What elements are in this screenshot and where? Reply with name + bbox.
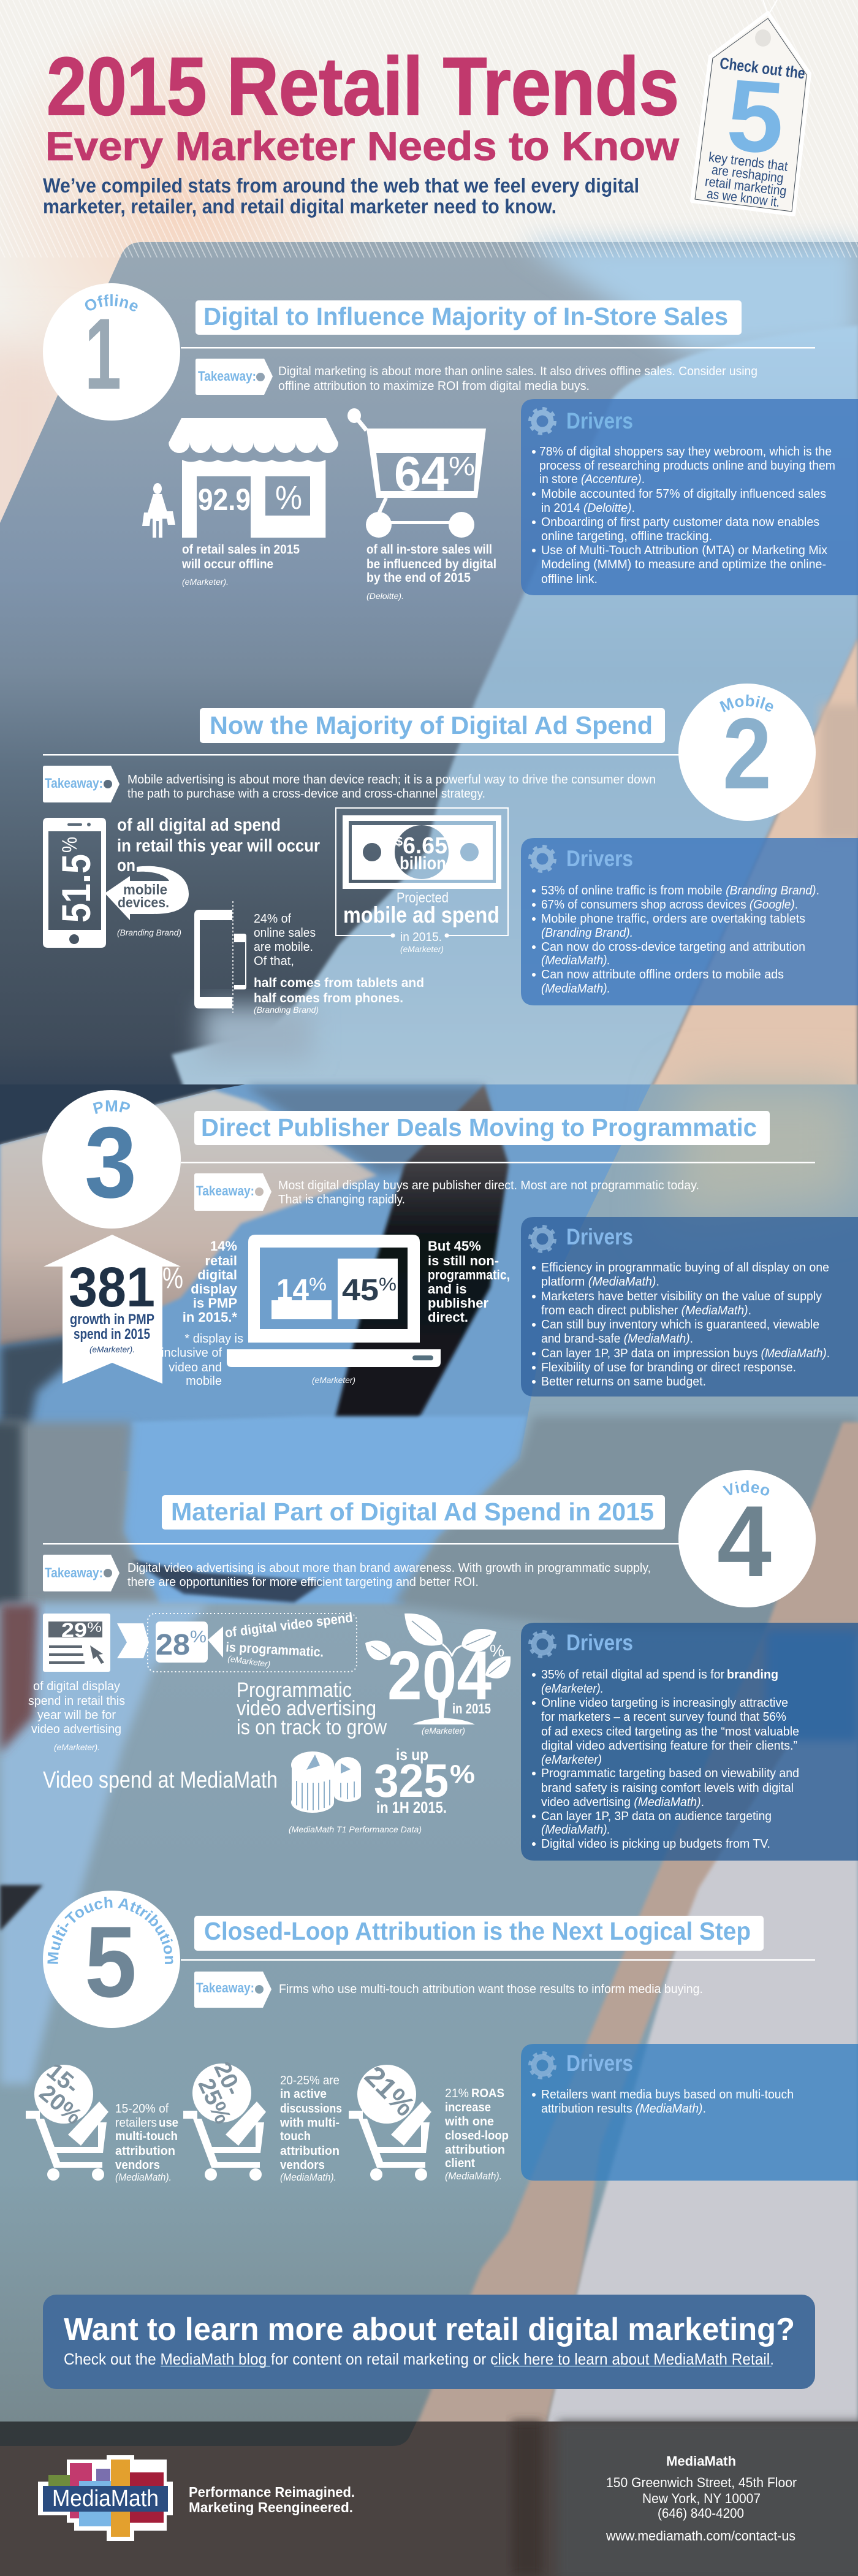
money box: $6.65 billion: billion xyxy=(400,853,446,874)
stat text: 20-25%: attribution xyxy=(280,2144,340,2158)
takeaway text: Digital marketing is about more than online sales. It also drives offline sales. Consider using xyxy=(278,365,757,378)
source: (Branding Brand) xyxy=(117,928,181,937)
stat text: 21%: with one xyxy=(444,2115,494,2128)
number badge 3: 3 xyxy=(85,1106,137,1219)
takeaway text: That is changing rapidly. xyxy=(278,1193,405,1206)
callout: 28% of digital video spend: 28 xyxy=(156,1629,190,1661)
callout: 28% of digital video spend: (eMarketer) xyxy=(227,1653,271,1669)
arrow: 381% growth: spend in 2015 xyxy=(74,1326,150,1343)
heading bar: Digital to Influence Majority of In-Store Sales xyxy=(203,302,728,330)
text: video spend: Video spend at MediaMath xyxy=(43,1767,278,1793)
stat text: 24%: (Branding Brand) xyxy=(254,1005,319,1015)
stat text: 20-25%: (MediaMath). xyxy=(280,2171,336,2183)
heading bar: Now the Majority of Digital Ad Spend xyxy=(210,711,653,739)
icon: laptop with bar chart: % xyxy=(309,1275,327,1295)
contact xyxy=(606,2453,797,2544)
panel: drivers 3 xyxy=(521,1217,858,1397)
panel: drivers 3: Better returns on same budget. xyxy=(541,1375,706,1389)
panel: drivers 5: Drivers xyxy=(566,2051,633,2076)
panel: drivers 4: Online video targeting is increasingly attractive xyxy=(541,1696,788,1710)
stat text: 15-20%: multi-touch xyxy=(115,2130,178,2143)
number badge 1: Offline xyxy=(85,294,138,311)
icon: cart with 64% xyxy=(347,408,486,538)
icon: phone with 51.5% xyxy=(43,818,106,948)
stat: 325%: % xyxy=(450,1759,475,1788)
takeaway text xyxy=(127,1561,651,1589)
stat text: 21%: increase xyxy=(445,2101,491,2114)
number badge 5: Multi-Touch Attribution xyxy=(47,1897,173,1964)
panel: drivers 3: platform (MediaMath). xyxy=(541,1275,659,1289)
icon: cart 20-25% xyxy=(183,2058,266,2181)
panel: drivers 3: Marketers have better visibility on the value of supply xyxy=(541,1290,822,1303)
panel: drivers 4: brand safety is raising comfort levels with digital xyxy=(541,1781,794,1795)
stat text: 24%: are mobile. xyxy=(254,940,313,954)
panel: drivers 2: 53% of online traffic is from mobile (Branding Brand). xyxy=(541,884,819,897)
panel: drivers 2 xyxy=(521,838,858,1005)
stat text: 51.5%: of all digital ad spend xyxy=(117,815,281,835)
intro text: We’ve compiled stats from around the web that we feel every digital xyxy=(43,174,639,197)
stat text: 45%: But 45% xyxy=(428,1238,481,1254)
section 2: mobile xyxy=(43,684,858,1015)
text: programmatic video xyxy=(237,1679,387,1739)
price tag: check out the 5 key trends: retail marketing xyxy=(704,173,788,199)
stat text: 24%: online sales xyxy=(254,926,316,940)
stat text: 21%: attribution xyxy=(445,2143,505,2157)
panel: drivers 5 xyxy=(521,2044,858,2181)
takeaway text: Digital video advertising is about more than brand awareness. With growth in programmatic supply, xyxy=(127,1561,651,1575)
stat: 325%: in 1H 2015. xyxy=(376,1798,447,1816)
intro text: marketer, retailer, and retail digital marketer need to know. xyxy=(43,195,556,218)
panel: drivers 4: Can layer 1P, 3P data on audience targeting xyxy=(541,1810,772,1823)
contact: MediaMath xyxy=(666,2453,736,2469)
price tag: check out the 5 key trends: Check out the xyxy=(719,54,806,82)
stat text: 14%: mobile xyxy=(186,1374,222,1388)
money box: $6.65 billion: in 2015. xyxy=(400,931,442,944)
panel: drivers 4: (eMarketer) xyxy=(541,1753,602,1767)
takeaway text: Firms who use multi-touch attribution want those results to inform media buying. xyxy=(279,1983,703,1996)
stat text: 64%: of all in-store sales will xyxy=(366,543,492,557)
panel: drivers 4: Digital video is picking up budgets from TV. xyxy=(541,1837,770,1851)
number badge 4 xyxy=(678,1470,816,1607)
stat text: 20-25%: vendors xyxy=(280,2159,325,2172)
money box: $6.65 billion xyxy=(336,808,508,954)
stat text: 14%: is PMP xyxy=(193,1295,237,1311)
panel: drivers 3: Efficiency in programmatic buying of all display on one xyxy=(541,1261,829,1275)
icon: film reels / coins xyxy=(291,1751,361,1813)
price tag: check out the 5 key trends: are reshaping xyxy=(711,162,784,186)
stat text: 45%: direct. xyxy=(428,1309,468,1325)
panel: drivers 3: and brand-safe (MediaMath). xyxy=(541,1332,693,1346)
number badge 5: 5 xyxy=(85,1905,137,2018)
panel: drivers 1: Mobile accounted for 57% of digitally influenced sales xyxy=(541,487,826,501)
store icon with 92.9%: % xyxy=(275,479,302,516)
icon: laptop with bar chart: 14 xyxy=(276,1273,309,1307)
section 1: offline xyxy=(43,283,858,601)
stat text: 29%: (eMarketer). xyxy=(54,1742,100,1752)
stat text: 29%: of digital display xyxy=(33,1680,120,1693)
money box: $6.65 billion: 6.65 xyxy=(403,833,447,859)
takeaway tag xyxy=(194,1173,271,1211)
icon: plant with 204%: in 2015 xyxy=(452,1701,491,1717)
stat text: 24% xyxy=(254,912,424,1015)
stat text: 20-25%: with multi- xyxy=(279,2116,340,2130)
stat text: 15-20% xyxy=(115,2102,178,2183)
stat text: 29%: year will be for xyxy=(37,1709,116,1722)
number badge 1: 1 xyxy=(85,297,121,410)
stat text: 45%: and is xyxy=(428,1281,467,1297)
icon: cart 15-20%: 15- xyxy=(42,2059,84,2100)
money box: $6.65 billion: $ xyxy=(395,834,403,849)
money box: $6.65 billion: mobile ad spend xyxy=(343,902,499,928)
panel: drivers 1: in store (Accenture). xyxy=(539,473,645,486)
icon: plant with 204%: (eMarketer) xyxy=(422,1726,465,1736)
heading bar: Material Part of Digital Ad Spend in 2015 xyxy=(171,1498,654,1526)
panel: drivers 4: (eMarketer). xyxy=(541,1682,604,1696)
arrow: 381% growth xyxy=(44,1235,183,1384)
icon: browser with 29%: 29 xyxy=(61,1619,87,1641)
icon: cart 21%: 21% xyxy=(359,2060,421,2122)
panel: drivers 4: (MediaMath). xyxy=(541,1823,610,1837)
callout: 28% of digital video spend: % xyxy=(190,1627,207,1646)
icon: laptop with bar chart: (eMarketer) xyxy=(312,1375,355,1385)
arrow: 381% growth: growth in PMP xyxy=(70,1311,154,1328)
number badge 4: 4 xyxy=(717,1485,772,1598)
stat text: 92.9% offline: will occur offline xyxy=(181,557,273,571)
panel: drivers 2: Mobile phone traffic, orders are overtaking tablets xyxy=(541,912,805,926)
panel: drivers 5: attribution results (MediaMath). xyxy=(541,2102,706,2116)
section 4: video xyxy=(28,1470,858,1861)
stat text: 24%: half comes from phones. xyxy=(254,991,403,1005)
call to action: Want to learn more about retail digital marketing? xyxy=(64,2312,795,2347)
callout: 28% of digital video spend xyxy=(148,1610,357,1672)
title: 2015 Retail Trends xyxy=(47,41,679,132)
arrow: 381% growth: 381 xyxy=(69,1256,155,1319)
call to action xyxy=(43,2295,815,2389)
text: programmatic video: Programmatic xyxy=(237,1679,352,1702)
takeaway tag xyxy=(43,1555,120,1591)
stat text: 21%: (MediaMath). xyxy=(445,2170,502,2182)
stat text: 14%: digital xyxy=(197,1267,237,1282)
contact: (646) 840-4200 xyxy=(658,2506,744,2521)
panel: drivers 2: (Branding Brand). xyxy=(541,926,633,940)
takeaway tag: Takeaway: xyxy=(196,1183,254,1198)
takeaway text: Mobile advertising is about more than device reach; it is a powerful way to drive the consumer down xyxy=(127,773,656,787)
number badge 2: Mobile xyxy=(719,694,773,712)
icon: phone with 51.5%: 51.5 xyxy=(53,854,99,923)
stat text: 21% xyxy=(444,2087,509,2182)
panel: drivers 2: (MediaMath). xyxy=(541,982,610,996)
price tag: check out the 5 key trends: key trends that xyxy=(708,149,789,174)
number badge 3: PMP xyxy=(93,1100,130,1115)
panel: drivers 2: Can now attribute offline orders to mobile ads xyxy=(541,968,784,981)
stat text: 15-20%: use xyxy=(159,2116,178,2130)
icon: laptop with bar chart: 45 xyxy=(342,1273,379,1307)
intro text xyxy=(43,174,639,218)
store icon with 92.9% xyxy=(169,418,338,538)
panel: drivers 1: process of researching products online and buying them xyxy=(539,459,835,473)
icon: plant with 204%: 204 xyxy=(387,1637,492,1714)
stat text: 20-25%: touch xyxy=(280,2130,311,2143)
panel: drivers 1: Onboarding of first party customer data now enables xyxy=(541,516,819,529)
tagline: Performance Reimagined. xyxy=(189,2484,355,2500)
stat text: 45% xyxy=(428,1238,510,1325)
price tag: check out the 5 key trends xyxy=(692,0,810,215)
subtitle: Every Marketer Needs to Know xyxy=(45,123,680,169)
panel: drivers 3: Can still buy inventory which is guaranteed, viewable xyxy=(541,1318,819,1332)
heading bar: Direct Publisher Deals Moving to Programmatic xyxy=(201,1113,757,1141)
stat text: 51.5% xyxy=(117,815,320,875)
stat text: 45%: is still non- xyxy=(428,1253,499,1268)
stat text: 15-20%: 15-20% of xyxy=(115,2102,169,2116)
text: programmatic video: is on track to grow xyxy=(237,1716,387,1739)
call to action: Check out the MediaMath blog for content on retail marketing or click here to learn about MediaMath Retail. xyxy=(64,2350,774,2368)
icon: cart 21% xyxy=(349,2060,431,2181)
arrow: 381% growth: (eMarketer). xyxy=(89,1344,135,1354)
money box: $6.65 billion: (eMarketer) xyxy=(400,944,444,954)
takeaway text: Most digital display buys are publisher direct. Most are not programmatic today. xyxy=(278,1179,699,1192)
stat text: 24%: Of that, xyxy=(254,955,294,968)
stat text: 51.5%: in retail this year will occur xyxy=(117,836,320,856)
panel: drivers 2: 67% of consumers shop across devices (Google). xyxy=(541,898,798,912)
heading bar: Closed-Loop Attribution is the Next Logical Step xyxy=(204,1917,751,1945)
stat text: 14% xyxy=(161,1238,243,1388)
icon: browser with 29%: % xyxy=(87,1620,102,1635)
takeaway tag: Takeaway: xyxy=(45,1565,103,1580)
stat text: 29%: video advertising xyxy=(31,1723,121,1736)
stat text: 20-25%: in active xyxy=(280,2087,327,2101)
stat text: 15-20%: (MediaMath). xyxy=(115,2171,172,2183)
stat: 325%: 325 xyxy=(374,1755,449,1807)
takeaway tag: Takeaway: xyxy=(198,368,256,384)
stat text: 15-20%: vendors xyxy=(115,2159,160,2172)
stat text: 21%: ROAS xyxy=(471,2087,504,2100)
stat text: 14%: inclusive of xyxy=(161,1346,222,1360)
callout: 28% of digital video spend: of digital video spend xyxy=(224,1610,354,1640)
takeaway text xyxy=(278,1179,699,1206)
arrow: mobile devices xyxy=(105,866,189,920)
number badge 1 xyxy=(43,283,180,421)
takeaway tag xyxy=(194,1972,271,2008)
takeaway tag xyxy=(43,766,120,802)
stat text: 14%: * display is xyxy=(184,1332,243,1346)
icon: split phone and tablet xyxy=(194,901,246,1013)
stat text: 15-20%: retailers xyxy=(115,2116,157,2130)
icon: shopper xyxy=(142,483,175,538)
stat text: 64%: be influenced by digital xyxy=(366,557,496,571)
stat: 325% xyxy=(289,1745,475,1834)
icon: cart 15-20% xyxy=(26,2059,108,2181)
panel: drivers 4: of ad execs cited targeting as the “most valuable xyxy=(541,1725,799,1739)
icon: plant with 204%: % xyxy=(490,1641,504,1660)
icon: browser with 29% xyxy=(43,1614,110,1672)
section 3: PMP xyxy=(42,1090,858,1397)
stat text: 64% xyxy=(366,543,496,601)
panel: drivers 1: offline link. xyxy=(541,573,598,586)
panel: drivers 1: Use of Multi-Touch Attribution (MTA) or Marketing Mix xyxy=(541,544,827,557)
stat text: 15-20%: attribution xyxy=(115,2144,175,2158)
stat text: 14%: in 2015.* xyxy=(183,1309,237,1325)
takeaway tag: Takeaway: xyxy=(45,775,103,791)
panel: drivers 4: digital video advertising feature for their clients.” xyxy=(541,1739,797,1753)
store icon with 92.9%: 92.9 xyxy=(198,482,251,517)
stat text: 45%: programmatic, xyxy=(428,1267,510,1282)
icon: phone with 51.5%: % xyxy=(58,837,82,853)
icon: laptop with bar chart xyxy=(227,1235,441,1385)
stat text: 24%: half comes from tablets and xyxy=(254,976,424,990)
stat: 325%: is up xyxy=(396,1745,428,1764)
stat text: 20-25% xyxy=(279,2074,342,2183)
panel: drivers 3: Can layer 1P, 3P data on impression buys (MediaMath). xyxy=(541,1347,830,1360)
arrow: chevron xyxy=(117,1623,149,1658)
tagline xyxy=(189,2484,355,2515)
section 5: multi-touch attribution xyxy=(26,1891,858,2183)
panel: drivers 1: Modeling (MMM) to measure and optimize the online- xyxy=(541,558,826,571)
stat text: 29%: spend in retail this xyxy=(28,1694,125,1708)
number badge 4: Video xyxy=(723,1480,770,1496)
number badge 2: 2 xyxy=(723,697,772,810)
stat text: 64%: by the end of 2015 xyxy=(366,571,471,585)
stat text: 20-25%: 20-25% are xyxy=(280,2074,340,2087)
stat text: 92.9% offline xyxy=(181,543,300,587)
callout: 28% of digital video spend: is programmatic. xyxy=(226,1639,324,1660)
stat text: 20-25%: discussions xyxy=(280,2102,342,2116)
panel: drivers 2: Can now do cross-device targeting and attribution xyxy=(541,940,805,954)
price tag: check out the 5 key trends: 5 xyxy=(723,58,788,175)
number badge 3 xyxy=(42,1090,181,1229)
panel: drivers 4: video advertising (MediaMath). xyxy=(541,1796,704,1809)
icon: cart with 64%: % xyxy=(449,451,475,481)
panel: drivers 4: branding xyxy=(727,1668,778,1682)
takeaway text xyxy=(127,773,656,801)
number badge 5 xyxy=(43,1891,180,2028)
contact: 150 Greenwich Street, 45th Floor xyxy=(606,2475,797,2490)
stat text: 64%: (Deloitte). xyxy=(366,591,404,601)
icon: cart 15-20%: 20% xyxy=(34,2080,86,2130)
tagline: Marketing Reengineered. xyxy=(189,2499,353,2515)
contact: New York, NY 10007 xyxy=(642,2491,761,2506)
stat text: 14%: 14% xyxy=(210,1238,237,1254)
money box: $6.65 billion: Projected xyxy=(397,890,449,905)
logo: MediaMath xyxy=(38,2455,173,2541)
panel: drivers 4: Programmatic targeting based on viewability and xyxy=(541,1767,799,1780)
stat text: 29% xyxy=(28,1680,125,1752)
stat text: 21%: closed-loop xyxy=(445,2129,509,2143)
arrow: mobile devices: mobile xyxy=(123,882,167,897)
panel: drivers 1: online targeting, offline tracking. xyxy=(541,530,712,543)
icon: cart 20-25%: 25% xyxy=(192,2075,236,2128)
takeaway text: offline attribution to maximize ROI from digital media buys. xyxy=(278,379,590,393)
price tag: check out the 5 key trends: as we know it. xyxy=(706,186,781,210)
arrow: mobile devices: devices. xyxy=(118,894,169,910)
arrow: 381% growth: % xyxy=(162,1262,183,1295)
number badge 2 xyxy=(678,684,816,821)
takeaway text: the path to purchase with a cross-device and cross-channel strategy. xyxy=(127,787,485,801)
icon: cart 20-25%: 20- xyxy=(208,2058,246,2100)
takeaway text: there are opportunities for more efficient targeting and better ROI. xyxy=(127,1576,479,1589)
takeaway tag: Takeaway: xyxy=(196,1980,254,1995)
stat text: 21%: 21% xyxy=(445,2087,469,2100)
stat text: 14%: display xyxy=(191,1281,238,1297)
stat text: 51.5%: on xyxy=(117,856,135,875)
panel: drivers 1: in 2014 (Deloitte). xyxy=(541,501,635,515)
icon: plant with 204% xyxy=(365,1614,511,1736)
logo: MediaMath: MediaMath xyxy=(52,2486,159,2512)
icon: cart with 64%: 64 xyxy=(394,446,449,501)
panel: drivers 1: Drivers xyxy=(566,408,633,433)
panel: drivers 2: (MediaMath). xyxy=(541,954,610,967)
panel: drivers 3: Flexibility of use for branding or direct response. xyxy=(541,1361,796,1374)
takeaway text xyxy=(278,365,757,393)
panel: drivers 3: from each direct publisher (MediaMath). xyxy=(541,1304,751,1317)
stat text: 45%: publisher xyxy=(428,1295,488,1311)
panel: drivers 1: 78% of digital shoppers say they webroom, which is the xyxy=(539,445,832,459)
stat text: 92.9% offline: (eMarketer). xyxy=(182,577,229,587)
icon: laptop with bar chart: % xyxy=(379,1275,397,1295)
takeaway tag xyxy=(196,359,273,395)
stat: 325%: (MediaMath T1 Performance Data) xyxy=(289,1824,422,1834)
stat text: 14%: video and xyxy=(169,1361,222,1374)
stat text: 14%: retail xyxy=(205,1253,237,1268)
footer xyxy=(38,2453,797,2544)
panel: drivers 1 xyxy=(521,399,858,595)
panel: drivers 2: Drivers xyxy=(566,846,633,871)
panel: drivers 4: for marketers – a recent survey found that 56% xyxy=(541,1710,786,1724)
panel: drivers 5: Retailers want media buys based on multi-touch xyxy=(541,2088,794,2102)
text: programmatic video: video advertising xyxy=(237,1697,376,1720)
contact: www.mediamath.com/contact-us xyxy=(606,2528,795,2544)
panel: drivers 4: 35% of retail digital ad spend is for xyxy=(541,1668,724,1682)
stat text: 21%: client xyxy=(445,2157,475,2170)
stat text: 92.9% offline: of retail sales in 2015 xyxy=(182,543,300,557)
header xyxy=(43,41,680,218)
panel: drivers 4 xyxy=(521,1623,858,1861)
stat text: 24%: 24% of xyxy=(254,912,291,926)
panel: drivers 4: Drivers xyxy=(566,1630,633,1655)
panel: drivers 3: Drivers xyxy=(566,1224,633,1249)
